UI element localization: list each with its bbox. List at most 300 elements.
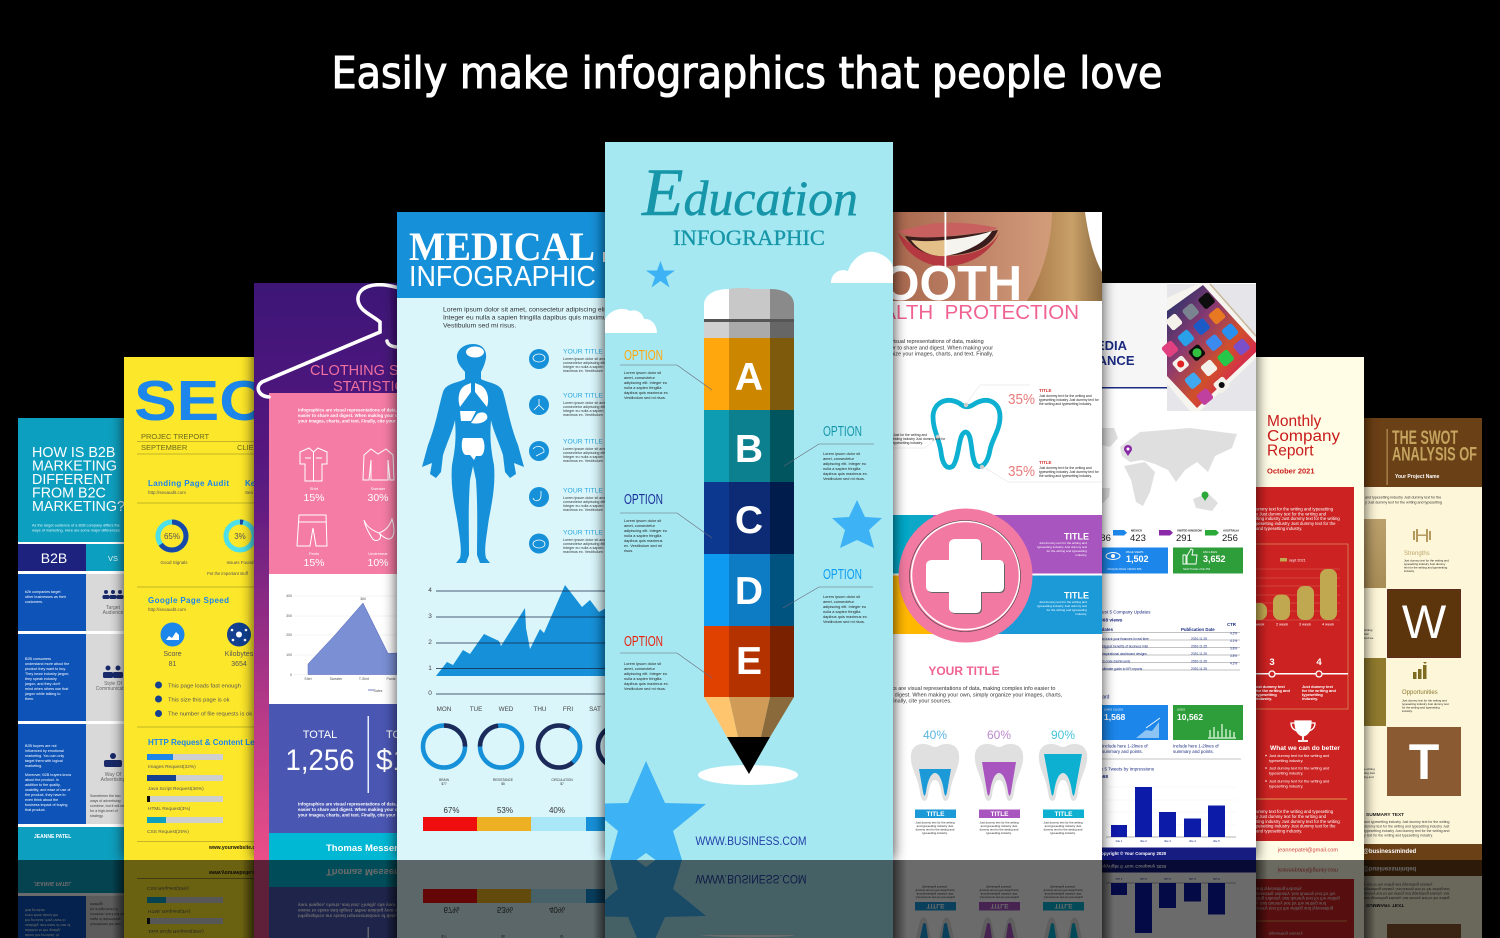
reflection of infographic cards: typesetting industry. — [922, 885, 948, 889]
pencil segment E: E — [736, 640, 762, 683]
callout: option E: Vestibulum sed mi risus. — [624, 686, 666, 691]
company updates table: 2020-11-25 — [1191, 637, 1207, 641]
section: google page speed: Google Page Speed — [148, 596, 229, 605]
pencil segment C: C — [735, 499, 763, 542]
tooth: 90 percent: dummy text for the writing and — [1044, 828, 1083, 832]
reflection of infographic cards: pesetting industry Just dummy text for the — [1256, 892, 1336, 896]
section: landing page audit: Landing Page Audit — [148, 479, 229, 488]
panel: B2B marketing infographic: that product. — [25, 808, 46, 812]
world map — [1102, 428, 1237, 511]
reflection of infographic cards: JEANNE PATEL — [34, 880, 71, 886]
icons: people — [102, 590, 124, 767]
panel: tooth health infographic — [853, 212, 1102, 860]
reflection of infographic cards: strategy. — [90, 902, 104, 906]
list: organ icons and titles: Integer eu nulla a sapien — [563, 409, 603, 413]
photo: smile — [893, 212, 1102, 301]
stat box: page views: UNIQUE PAGE VIEWS 886 — [1107, 567, 1142, 571]
panel: monthly company report infographic — [1250, 357, 1364, 860]
tooth: 60 percent: typesetting industry. — [986, 831, 1012, 835]
reflection of infographic cards: easier to share and digest. When making your own, simply — [298, 908, 421, 913]
company updates table: 4.2% — [1230, 632, 1237, 636]
website: WWW.BUSINESS.COM — [696, 836, 806, 848]
company updates table: to track your finances in real time — [1102, 637, 1149, 641]
heading: SWOT analysis: THE SWOT — [1392, 427, 1458, 449]
reflection of infographic cards: y text for the writing and typesetting industry. — [1364, 882, 1433, 886]
icon: trophy — [1291, 721, 1315, 741]
opportunities text: industry. — [1402, 709, 1413, 713]
panel: clothing statistics infographic: your images, charts, and text. Finally, cite your sources. — [298, 418, 415, 424]
donut: 65 percent: 65% — [164, 532, 180, 541]
stat box: links clicked: LINKS CLICKS — [1104, 708, 1123, 712]
panel: B2B marketing infographic: JEANNE PATEL — [34, 834, 71, 840]
panel: clothing statistics infographic: TOTAL — [386, 729, 420, 741]
reflection of infographic cards: Just dummy text for the writing — [915, 896, 955, 900]
company updates table: 4.2% — [1230, 662, 1237, 666]
timeline steps: industry. — [1302, 696, 1318, 701]
list: organ icons and titles: maximus ex. Vestibulum — [563, 550, 603, 554]
list: organ icons and titles: consectetur adipiscing elit. — [563, 542, 606, 546]
icon: tooth outline with callouts: Just dummy text for the writing and — [1039, 466, 1092, 470]
stat box: page views: PAGE VIEWS — [1126, 550, 1143, 554]
list: organ icons and titles: consectetur adipiscing elit. — [563, 361, 606, 365]
panel: tooth health infographic: ics are visual representations of data, making complex info easier to — [890, 686, 1055, 692]
opportunities text: typesetting industry Just dummy text — [1402, 702, 1449, 706]
tile: W letter: W — [1402, 595, 1447, 648]
panel: right SWOT analysis infographic: and typesetting industry Just dummy text for the — [1365, 496, 1441, 500]
panel: SEO report infographic: Seo — [245, 490, 254, 495]
donut charts: BRAIN — [439, 778, 450, 782]
stacked percentage bar: 67% — [443, 806, 460, 815]
heading: clothing statistics — [310, 365, 397, 391]
tooth: 90 percent: 90% — [1051, 728, 1075, 742]
tooth: 40 percent: TITLE — [926, 811, 945, 818]
panel: B2B marketing infographic: Advertising — [101, 777, 126, 783]
reflection of infographic cards: for a high-level of — [90, 907, 118, 911]
bar chart — [1250, 544, 1348, 709]
header band — [1364, 418, 1482, 487]
timeline steps: 4 — [1316, 657, 1322, 668]
summary text: and typesetting industry Just dummy text for the writing — [1364, 820, 1449, 824]
timeline steps: 3 — [1269, 657, 1275, 668]
panel: clothing statistics infographic: Shirt — [310, 486, 319, 491]
panel: B2B marketing infographic: usability, and ease of use of — [25, 788, 71, 792]
donut: 65 percent — [158, 522, 188, 565]
strengths text: industry. — [1404, 569, 1415, 573]
panel: clothing statistics infographic: 15% — [303, 557, 325, 569]
reflection of infographic cards: typesetting industry. — [1050, 885, 1076, 889]
reflection of infographic cards: dummy text for the writing and — [980, 888, 1019, 892]
panel: B2B marketing infographic: Audience — [103, 610, 124, 616]
timeline steps: for the writing and — [1302, 688, 1337, 693]
list: organ icons and titles: Integer eu nulla a sapien — [563, 365, 603, 369]
list: organ icons and titles: Integer eu nulla a sapien — [563, 504, 603, 508]
strengths text — [1404, 551, 1449, 573]
photo: smartphone — [1161, 283, 1256, 411]
list: organ icons and titles: Lorem ipsum dolor sit amet, — [563, 496, 608, 500]
callout: option D: Vestibulum sed mi risus. — [823, 619, 865, 624]
company updates table: biggest benefits of business intel — [1102, 644, 1148, 648]
pencil segment D — [704, 554, 794, 626]
panel: right SWOT analysis infographic: and we — [1364, 636, 1374, 640]
panel: B2B marketing infographic: VS — [108, 554, 118, 563]
check list: The number of file requests is ok — [168, 712, 252, 718]
panel: B2B marketing infographic: Way Of — [105, 772, 122, 778]
icon: tooth outline with callouts: TITLE — [1039, 460, 1052, 465]
area chart: SAT — [589, 706, 601, 713]
company updates table: 1,568 views — [1096, 618, 1123, 624]
area chart — [269, 574, 397, 704]
heading: how is B2B different: HOW IS B2B — [32, 445, 115, 461]
icon: tooth outline with callouts: 35% — [1008, 392, 1035, 408]
company updates table: 2020-11-25 — [1191, 644, 1207, 648]
bar chart: 4 week — [1322, 622, 1334, 626]
panel: B2B marketing infographic: ways of advertising — [90, 799, 121, 803]
timeline steps: ust dummy text — [1256, 684, 1285, 689]
area chart: Sweater — [330, 677, 343, 681]
donut: 3 percent: 3% — [234, 532, 246, 541]
icon: tooth outline with callouts: typesetting industry Just dummy text for — [1039, 398, 1100, 402]
panel: SEO report infographic: Score — [163, 651, 182, 658]
panel: social media performance infographic: Include here 1-2lines of — [1173, 744, 1219, 748]
panel: monthly company report infographic: ummy text for the writing and typesetting — [1256, 506, 1334, 512]
callout: option B: dapibus quis maximus ex. — [823, 471, 868, 476]
list: organ icons and titles: consectetur adipiscing elit. — [563, 405, 606, 409]
reflection of infographic cards: TITLE — [926, 902, 945, 909]
reflection of infographic cards: title 2 — [1140, 877, 1147, 881]
list: organ icons and titles: maximus ex. Vestibulum — [563, 413, 603, 417]
company updates table: CTR — [1227, 622, 1237, 627]
reflection of infographic cards: combine, but it will be — [90, 912, 124, 916]
panel: right SWOT analysis infographic: ting Just — [1364, 771, 1375, 775]
tooth: 90 percent: Just dummy text for the writing — [1043, 820, 1083, 824]
callout: option A: Lorem ipsum dolor sit — [624, 370, 662, 375]
band captions: for the writing and typesetting — [1047, 549, 1087, 553]
heading: SEO: SEO — [134, 369, 269, 433]
strengths text: Strengths — [1404, 551, 1430, 557]
area chart: MON — [437, 706, 452, 713]
panel: B2B marketing infographic — [18, 418, 131, 860]
list: organ icons and titles: YOUR TITLE — [563, 438, 603, 446]
callout: option C: nulla a sapien fringilla — [624, 533, 662, 538]
tooth: 90 percent — [1039, 728, 1087, 835]
reflection of infographic cards: and typesetting industry Just dummy text for the writing — [1364, 896, 1449, 900]
reflection of infographic cards: title 3 — [1164, 877, 1171, 881]
pencil shadow ellipse — [698, 765, 798, 785]
company updates table: inspirational dashboard designs — [1102, 652, 1147, 656]
callout: option D: Lorem ipsum dolor sit — [823, 594, 861, 599]
tile: W letter — [1388, 590, 1460, 658]
country stats: 291 — [1176, 533, 1192, 544]
country stats: AUSTRALIA — [1223, 528, 1239, 532]
panel: medical infographic: INFOGRAPHIC — [409, 261, 596, 293]
list: organ icons and titles: YOUR TITLE — [563, 488, 603, 494]
reflection of infographic cards: 40% — [549, 905, 565, 914]
timeline steps: for the writing and — [1256, 688, 1291, 693]
reflection of infographic cards: ways of advertising — [90, 917, 121, 921]
panel: SEO report infographic: Key — [245, 479, 260, 488]
heading: social media performance: MANCE — [1087, 353, 1135, 368]
panel: SEO report infographic: 81 — [169, 661, 176, 668]
donut: 3 percent — [226, 522, 254, 565]
strengths text: Just dummy text for the writing and — [1404, 558, 1449, 562]
reflection of infographic cards: and typesetting industry Just — [917, 892, 954, 896]
pencil segment C — [704, 482, 794, 554]
reflection of infographic cards: the product, they have to — [25, 918, 66, 922]
callout: option C: risus. — [624, 548, 633, 553]
reflection of infographic cards: and typesetting industry Just — [981, 892, 1018, 896]
tile: opportunities — [1364, 658, 1386, 726]
panel: B2B marketing infographic: them. — [25, 697, 34, 701]
area chart: 2 — [428, 639, 432, 646]
pencil segment B: B — [735, 428, 763, 471]
list: what we can do better: What we can do better — [1270, 745, 1340, 752]
company updates table: 4.1% — [1230, 639, 1237, 643]
list: organ icons and titles: Integer eu nulla a sapien — [563, 455, 603, 459]
heading: monthly company report — [1267, 413, 1340, 460]
panel: B2B marketing infographic: B2B — [41, 550, 67, 566]
summary text — [1364, 812, 1449, 838]
area chart: THU — [534, 706, 547, 713]
callout: option E: nulla a sapien fringilla — [624, 676, 662, 681]
donut charts — [420, 723, 605, 786]
band captions — [1037, 532, 1089, 616]
tweets bar chart: title 2 — [1140, 839, 1147, 843]
icon: large star — [586, 761, 706, 860]
panel: monthly company report infographic: y Just dummy text for the writing and — [1256, 512, 1327, 516]
opportunities text — [1402, 690, 1449, 713]
panel: monthly company report infographic: October 2021 — [1267, 466, 1315, 476]
icon: tooth outline with callouts: esting industry Just dummy text for — [893, 437, 946, 441]
area chart: FRI — [563, 706, 573, 713]
company updates table: Publication Date — [1181, 627, 1215, 632]
callout: option B: OPTION — [823, 424, 862, 440]
panel: right SWOT analysis infographic: writing — [1364, 628, 1373, 632]
icon: tooth outline with callouts: typesetting industry. — [893, 441, 923, 445]
panel: monthly company report infographic: ummy text for the writing and typesetting — [1256, 809, 1334, 814]
callout: option B: amet, consectetur — [823, 456, 855, 461]
callout: option A: nulla a sapien fringilla — [624, 385, 662, 390]
area chart: TUE — [470, 706, 482, 713]
summary text: typesetting industry Just dummy text for the writing and — [1364, 829, 1449, 833]
panel: B2B marketing infographic: for a high-level of — [90, 809, 118, 813]
panel: clothing statistics infographic: Thomas Messer Smith — [326, 843, 427, 854]
panel: SEO report infographic: Java Script Request(36%) — [148, 786, 204, 792]
panel: B2B marketing infographic: the product, they have to — [25, 793, 66, 797]
donut charts: CIRCULATION — [551, 778, 573, 782]
reflection of infographic cards: title 1 — [1116, 877, 1123, 881]
band captions: for the writing and typesetting — [1047, 608, 1087, 612]
panel: SEO report infographic — [124, 357, 272, 860]
reflection of infographic cards: typesetting industry Just dummy text for the writing and — [1364, 887, 1449, 891]
list: organ icons and titles: YOUR TITLE — [563, 392, 603, 400]
strengths text: text for the writing and typesetting — [1404, 566, 1448, 570]
list: what we can do better: typesetting industry. — [1269, 770, 1303, 776]
section: HTTP requests bars: HTTP Request & Content Length — [148, 738, 272, 747]
panel: B2B marketing infographic: product they want to buy. — [25, 667, 66, 671]
stat box: fan likes: FAN LIKES — [1203, 550, 1217, 554]
callout: option A: OPTION — [624, 348, 663, 364]
panel: social media performance infographic — [1085, 283, 1256, 860]
reflection of infographic cards: HTML Request(3%) — [148, 908, 191, 914]
tile: T letter: T — [1409, 734, 1439, 790]
reflection of infographic cards: SUMMARY TEXT — [1366, 902, 1404, 908]
list: organ icons and titles: YOUR TITLE — [563, 348, 603, 356]
donut charts: $7 — [560, 782, 564, 786]
icon: medical cross badge — [898, 508, 1032, 642]
panel: medical infographic: Vestibulum sed mi risus. — [443, 322, 516, 330]
area chart: 0 — [428, 690, 432, 697]
callout: option E: amet, consectetur — [624, 666, 656, 671]
tweets bar chart: title 3 — [1164, 839, 1171, 843]
area chart: 100 — [286, 653, 292, 657]
infographic cards fan — [18, 142, 1482, 860]
area chart — [428, 585, 606, 713]
tile: strengths — [1364, 519, 1386, 588]
panel: clothing statistics infographic: $1,5 — [376, 744, 434, 777]
panel: clothing statistics infographic: 1,256 — [286, 744, 354, 777]
timeline steps: industry. — [1256, 696, 1272, 701]
heading: clothing statistics: CLOTHING STATISTICS — [310, 363, 471, 379]
callout: option C: OPTION — [624, 492, 663, 508]
reflection of infographic cards: Just dummy text for the writing — [979, 896, 1019, 900]
list: organ icons and titles: maximus ex. Vestibulum — [563, 508, 603, 512]
callout: option A: Vestibulum sed mi risus. — [624, 395, 666, 400]
panel: B2B marketing infographic: marketing. — [25, 764, 42, 768]
list: what we can do better: Just dummy text for the writing and — [1269, 778, 1329, 784]
summary text: SUMMARY TEXT — [1366, 812, 1404, 818]
band captions: TITLE — [1064, 532, 1089, 542]
totals panel — [269, 704, 397, 833]
title: Easily make infographics that people love — [332, 48, 1162, 99]
heading: clothing statistics: STATISTICS — [333, 379, 415, 395]
callout: option E — [620, 634, 712, 691]
band captions: Just dummy text for the writing and — [1039, 600, 1087, 604]
panel: clothing statistics infographic: 10% — [367, 557, 389, 569]
panel: B2B marketing infographic: even think about the — [25, 798, 58, 802]
country stats: 386 — [1095, 533, 1111, 544]
pencil segment A: A — [735, 356, 763, 399]
list: organ icons and titles: YOUR TITLE — [563, 530, 603, 536]
panel: right SWOT analysis infographic: Your Project Name — [1395, 474, 1440, 480]
panel: monthly company report infographic: tting industry Just dummy text for the writing — [1256, 819, 1340, 824]
company updates table: 4.8% — [1230, 654, 1237, 658]
callout: option B — [784, 424, 874, 481]
callout: option C: Lorem ipsum dolor sit — [624, 518, 662, 523]
panel: tooth health infographic: HEALTH PROTECTION — [854, 301, 1079, 324]
panel: SEO report infographic: 3654 — [231, 661, 247, 668]
panel: SEO report infographic: CLIENT — [237, 443, 264, 452]
panel: B2B marketing infographic: Sometimes the two — [90, 794, 121, 798]
panel: monthly company report infographic: and typesetting industry. — [1256, 526, 1302, 531]
timeline steps: typesetting — [1302, 692, 1323, 697]
list: what we can do better — [1265, 745, 1340, 788]
icon: kilobytes — [227, 622, 251, 646]
panel: clothing statistics infographic: your images, charts, and text. Finally, cite your sources. — [298, 812, 415, 818]
callout: option B: Vestibulum sed mi risus. — [823, 476, 865, 481]
panel: social media performance infographic: summary and points. — [1173, 749, 1214, 754]
opportunities text: Opportunities — [1402, 690, 1438, 696]
icon: tooth outline with callouts: typesetting industry Just dummy text for — [1039, 470, 1100, 474]
list: organ icons and titles: Integer eu nulla a sapien — [563, 546, 603, 550]
panel: monthly company report infographic: and typesetting industry. — [1256, 828, 1302, 834]
callout: option E: adipiscing elit. Integer eu — [624, 671, 667, 676]
panel: monthly company report infographic: pesetting industry Just dummy text for the — [1256, 521, 1336, 526]
donut: 65 percent: Good Signals — [160, 560, 188, 565]
reflection of infographic cards: dummy text for the writing and — [916, 888, 955, 892]
company updates table: to crate dashboards — [1102, 660, 1131, 664]
icon: cloud right — [831, 252, 893, 283]
panel: B2B marketing infographic: Style Of — [104, 681, 122, 687]
stat box: links clicked — [1096, 705, 1168, 740]
subheading: infographic: INFOGRAPHIC — [673, 225, 825, 250]
heading: how is B2B different: DIFFERENT — [32, 472, 112, 488]
reflection of infographic cards: dummy text for the writing and typesetting industry Just — [1364, 892, 1449, 896]
B2B vs header — [18, 544, 86, 571]
panel: SEO report infographic: http://seoaudit.com — [148, 607, 186, 612]
tweets bar chart — [1096, 766, 1236, 843]
tooth: 90 percent: TITLE — [1054, 811, 1073, 818]
company updates table: Updates — [1096, 627, 1114, 632]
tooth: 60 percent: TITLE — [990, 811, 1009, 818]
tooth: 90 percent: typesetting industry. — [1050, 831, 1076, 835]
callout: option D: amet, consectetur — [823, 599, 855, 604]
panel: B2B marketing infographic: marketing. You can only — [25, 754, 64, 758]
list: organ icons and titles: Lorem ipsum dolor sit amet, — [563, 447, 608, 451]
list: what we can do better: typesetting industry. — [1269, 758, 1303, 763]
reflection of infographic cards: jeannepatel@gmail.com — [1277, 866, 1338, 872]
stat box: links clicked: 1,568 — [1104, 712, 1126, 722]
list: organ icons and titles: Lorem ipsum dolor sit amet, — [563, 357, 608, 361]
heading: social media performance: MEDIA — [1085, 338, 1128, 353]
panel: B2B marketing infographic: target them with logical — [25, 759, 63, 763]
opportunities text: Just dummy text for the writing and — [1402, 698, 1447, 702]
icon: dumbbell — [1413, 529, 1431, 542]
timeline steps: typesetting — [1256, 692, 1277, 697]
footer band — [1102, 848, 1256, 860]
reflection of infographic cards: 53% — [497, 905, 513, 914]
opportunities text: for the writing and typesetting — [1402, 706, 1440, 710]
callout: option A: dapibus quis maximus ex. — [624, 390, 669, 395]
reflection of infographic cards: www.yourwebsite.com — [208, 869, 263, 875]
panel: monthly company report infographic: pesetting industry Just dummy text for the — [1256, 824, 1336, 828]
panel: B2B marketing infographic: business impact of buying — [25, 803, 67, 807]
list: what we can do better: typesetting industry. — [1269, 784, 1303, 788]
stat box: likes — [1173, 705, 1243, 740]
timeline steps: Just dummy text — [1302, 684, 1334, 689]
list: organ icons and titles: maximus ex. Vestibulum — [563, 459, 603, 463]
panel: right SWOT analysis infographic: y Just dummy text for the writing and typesetting — [1365, 500, 1442, 504]
area chart: 400 — [286, 594, 292, 598]
panel: B2B marketing infographic: combine, but it will be — [90, 804, 124, 808]
stat box: page views — [1096, 548, 1168, 574]
panel: B2B marketing infographic: B2B buyers are not — [25, 744, 57, 748]
panel: B2B marketing infographic: understand more about the — [25, 662, 69, 666]
panel: B2B marketing infographic: Communication — [96, 686, 131, 692]
reflection of infographic cards: tting industry Just dummy text for the writing — [1256, 896, 1340, 901]
donut charts: RESISTANCE — [493, 778, 513, 782]
callout: option D — [783, 567, 873, 624]
tweets bar chart: title 1 — [1116, 839, 1123, 843]
reflection of infographic cards: about the product. In — [25, 933, 59, 937]
icon: hanger — [258, 285, 399, 397]
tooth: 90 percent: and typesetting industry Just — [1045, 824, 1082, 828]
panel: B2B marketing infographic: Moreover, B2B buyers know — [25, 773, 71, 777]
reflection of infographic cards: even think about the — [25, 913, 58, 917]
panel: SEO report infographic: Put the important stuff — [207, 571, 249, 576]
reflection of infographic cards: and typesetting industry Just — [1045, 892, 1082, 896]
tweets bar chart: 1,568 — [1096, 774, 1108, 780]
panel: SEO report infographic: www.yourwebsite.com — [208, 845, 263, 851]
